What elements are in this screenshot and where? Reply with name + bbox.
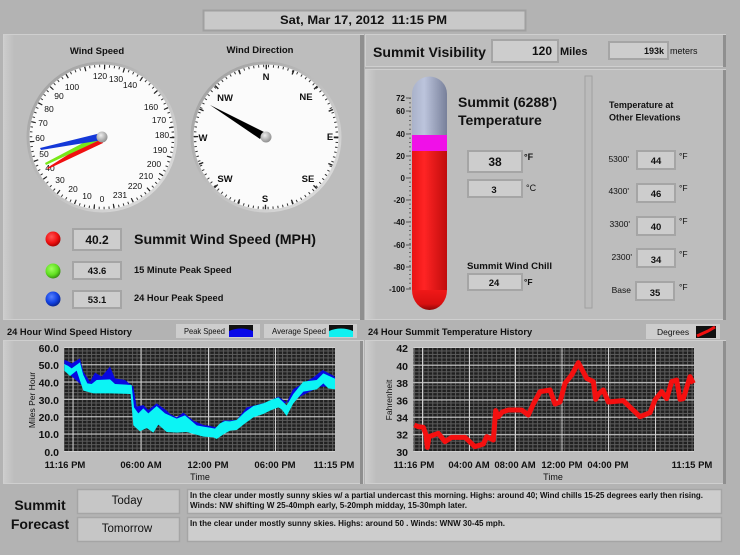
chart: wind speed history: 30.0 [39, 395, 59, 407]
gauge: wind direction: S [262, 194, 268, 205]
chart: wind speed history: 40.0 [39, 378, 59, 390]
readout: wind chill: 24 [489, 278, 500, 289]
date and time header [204, 10, 526, 30]
needle: current speed [47, 135, 103, 169]
gauge: wind speed: 40 [45, 163, 55, 173]
gauge: wind speed: 90 [54, 91, 64, 101]
readout: 2300 [611, 249, 688, 267]
readout: 3300: 40 [651, 222, 661, 233]
gauge: wind speed: 140 [123, 80, 137, 90]
chart: wind speed history: 06:00 PM [254, 460, 296, 471]
gauge: wind speed: 80 [44, 104, 54, 114]
gauge: wind speed: 70 [38, 118, 48, 128]
readout: 2300: 34 [651, 255, 662, 266]
gauge: wind speed: 231 [113, 190, 127, 200]
gauge: wind speed: 100 [65, 82, 79, 92]
panel: summit visibility: 193k [644, 46, 665, 56]
chart: wind speed history: 10.0 [39, 429, 59, 441]
readout: 3300: 3300' [609, 219, 630, 229]
readout: 24 hour peak: 24 Hour Peak Speed [134, 293, 224, 303]
forecast: today [188, 490, 722, 514]
readout: 15 minute peak: 15 Minute Peak Speed [134, 265, 232, 275]
gauge: wind speed: 0 [100, 194, 105, 204]
readout: 15 minute peak [46, 262, 232, 279]
needle: 24 hour peak [40, 133, 103, 150]
gauge: wind speed: 160 [144, 102, 158, 112]
gauge: wind speed: 30 [55, 175, 65, 185]
gauge: wind direction: SE [302, 174, 314, 185]
chart: temperature history: 11:16 PM [394, 460, 434, 471]
thermometer: -40 [393, 218, 406, 227]
gauge: wind speed: 50 [39, 149, 49, 159]
chart: temperature history: 12:00 PM [541, 460, 583, 471]
forecast: today: Winds: NW shifting W 25-40mph early, 5-20mph midday, 15-30mph later. [190, 501, 467, 510]
series: peak speed [64, 358, 335, 433]
readout: 2300: 2300' [611, 252, 632, 262]
thermometer: 60 [396, 107, 406, 116]
chart: wind speed history: Miles Per Hour [27, 372, 37, 428]
panel: temperature [366, 70, 726, 320]
thermometer: 0 [401, 174, 406, 183]
readout: 24 hour peak [46, 291, 224, 308]
chart: wind speed history: 50.0 [39, 360, 59, 372]
chart: wind speed history: Time [190, 472, 210, 482]
gauge: wind speed: 180 [155, 130, 169, 140]
thermometer: -100 [389, 285, 406, 294]
panel: summit visibility: meters [670, 46, 698, 56]
panel: temperature history [366, 324, 726, 484]
thermometer: -60 [393, 241, 406, 250]
legend: degrees: Degrees [657, 327, 689, 337]
series: average speed [64, 362, 335, 439]
readout: wind chill [467, 261, 552, 290]
heading: summit temperature: Temperature [458, 112, 542, 128]
readout: celsius [468, 180, 537, 197]
gauge: wind speed: 10 [82, 191, 92, 201]
gauge: wind speed: 200 [147, 159, 161, 169]
thermometer: 72 [396, 94, 406, 103]
gauge: wind direction: NE [299, 92, 313, 103]
readout: summit wind speed: 40.2 [85, 233, 109, 247]
readout: base: 35 [650, 288, 661, 299]
chart: wind speed history: 0.0 [44, 447, 59, 459]
heading: other elevations: Temperature at [609, 100, 673, 110]
button: today [78, 490, 180, 514]
readout: fahrenheit: °F [524, 152, 534, 162]
chart: wind speed history: 11:16 PM [45, 460, 85, 471]
readout: fahrenheit [468, 151, 534, 172]
readout: 4300: 4300' [608, 186, 629, 196]
readout: summit wind speed: Summit Wind Speed (MPH) [134, 232, 316, 248]
chart: temperature history: 30 [396, 447, 408, 459]
legend: peak speed [176, 324, 260, 338]
forecast: tomorrow: In the clear under mostly sunny skies. Highs: around 50 . Winds: WNW 30-45 mph. [190, 519, 505, 528]
chart: wind speed history [27, 343, 354, 482]
readout: base [612, 282, 688, 300]
chart: temperature history: 40 [396, 361, 408, 373]
gauge: wind speed: 170 [152, 115, 166, 125]
needle: 15 minute peak [45, 134, 102, 165]
readout: wind chill: Summit Wind Chill [467, 261, 552, 271]
gauge: wind speed: 190 [153, 145, 167, 155]
gauge: wind direction: W [199, 133, 208, 144]
readout: 4300: 46 [651, 189, 661, 200]
gauge: wind speed: 20 [68, 184, 78, 194]
chart: temperature history: Fahrenheit [384, 379, 394, 420]
gauge: wind direction [190, 62, 342, 212]
readout: celsius: °C [526, 183, 537, 193]
thermometer: -20 [393, 196, 406, 205]
readout: base: Base [612, 285, 631, 295]
gauge: wind speed: 220 [128, 181, 142, 191]
heading: other elevations: Other Elevations [609, 112, 681, 122]
gauge: wind direction: E [327, 132, 333, 143]
button: today: Today [112, 495, 143, 507]
chart: temperature history [384, 343, 712, 482]
readout: 5300 [608, 151, 688, 169]
chart: wind speed history: 06:00 AM [120, 460, 162, 471]
panel: summit visibility [366, 34, 726, 67]
chart: temperature history: 38 [396, 378, 408, 390]
chart: temperature history: 34 [396, 412, 408, 424]
chart: temperature history: 08:00 AM [494, 460, 536, 471]
date and time header: Sat, Mar 17, 2012 11:15 PM [280, 15, 447, 27]
thermometer: 40 [396, 130, 406, 139]
readout: 5300: 44 [651, 156, 662, 167]
panel: wind history [4, 324, 364, 484]
gauge: wind speed: 210 [139, 171, 153, 181]
legend: average speed [264, 324, 357, 338]
chart: wind speed history: 12:00 PM [187, 460, 229, 471]
readout: 5300: 5300' [608, 154, 629, 164]
readout: celsius: 3 [491, 185, 497, 196]
gauge: wind speed [26, 62, 178, 212]
readout: 4300: °F [679, 183, 688, 193]
gauge: wind direction: N [263, 72, 270, 83]
thermometer: -80 [393, 263, 406, 272]
panel: summit visibility: Summit Visibility [373, 44, 486, 60]
readout: fahrenheit: 38 [488, 155, 502, 169]
gauge title: wind speed: Wind Speed [70, 46, 124, 57]
divider [585, 76, 592, 308]
panel: summit visibility: Miles [560, 46, 588, 58]
gauge: wind speed: 120 [93, 71, 107, 81]
button: tomorrow: Tomorrow [102, 523, 153, 535]
chart: temperature history: 04:00 PM [587, 460, 629, 471]
readout: 24 hour peak: 53.1 [88, 295, 107, 306]
forecast heading: Forecast [11, 516, 70, 532]
chart: wind speed history: 11:15 PM [314, 460, 354, 471]
chart: wind speed history: 60.0 [39, 343, 59, 355]
chart: temperature history: 36 [396, 396, 408, 408]
chart: temperature history: 42 [396, 343, 408, 355]
thermometer [389, 76, 447, 310]
readout: wind chill: °F [524, 277, 533, 287]
panel: summit visibility: 120 [532, 44, 552, 58]
readout: 2300: °F [679, 249, 688, 259]
chart: temperature history: 32 [396, 430, 408, 442]
chart: temperature history: 11:15 PM [672, 460, 712, 471]
forecast heading: Summit [14, 497, 66, 513]
readout: 3300: °F [679, 216, 688, 226]
readout: base: °F [679, 282, 688, 292]
legend: degrees [646, 324, 720, 339]
gauge: wind direction: NW [217, 93, 233, 104]
heading: temperature history: 24 Hour Summit Temperature History [368, 327, 533, 337]
readout: 4300 [608, 183, 688, 202]
series: degrees [414, 363, 693, 447]
legend: peak speed: Peak Speed [184, 326, 225, 336]
panel: wind gauges [4, 34, 364, 320]
button: tomorrow [78, 518, 180, 542]
gauge: wind speed: 130 [109, 74, 123, 84]
forecast: tomorrow [188, 518, 722, 542]
gauge: wind direction: SW [217, 174, 233, 185]
chart: temperature history: 04:00 AM [448, 460, 490, 471]
heading: summit temperature: Summit (6288') [458, 94, 557, 110]
heading: wind history: 24 Hour Wind Speed History [7, 327, 133, 337]
readout: 5300: °F [679, 151, 688, 161]
needle: direction [210, 105, 264, 139]
chart: temperature history: Time [543, 472, 563, 482]
legend: average speed: Average Speed [272, 326, 326, 336]
chart: wind speed history: 20.0 [39, 412, 59, 424]
forecast: today: In the clear under mostly sunny skies w/ a partial undercast this morning. Highs: around 40; Wind chills 15-25 degrees early then rising. [190, 491, 703, 500]
readout: 15 minute peak: 43.6 [88, 266, 106, 277]
thermometer: 20 [396, 152, 406, 161]
gauge: wind speed: 60 [35, 133, 45, 143]
readout: 3300 [609, 216, 688, 235]
readout: summit wind speed [46, 229, 316, 250]
gauge title: wind direction: Wind Direction [227, 45, 294, 56]
